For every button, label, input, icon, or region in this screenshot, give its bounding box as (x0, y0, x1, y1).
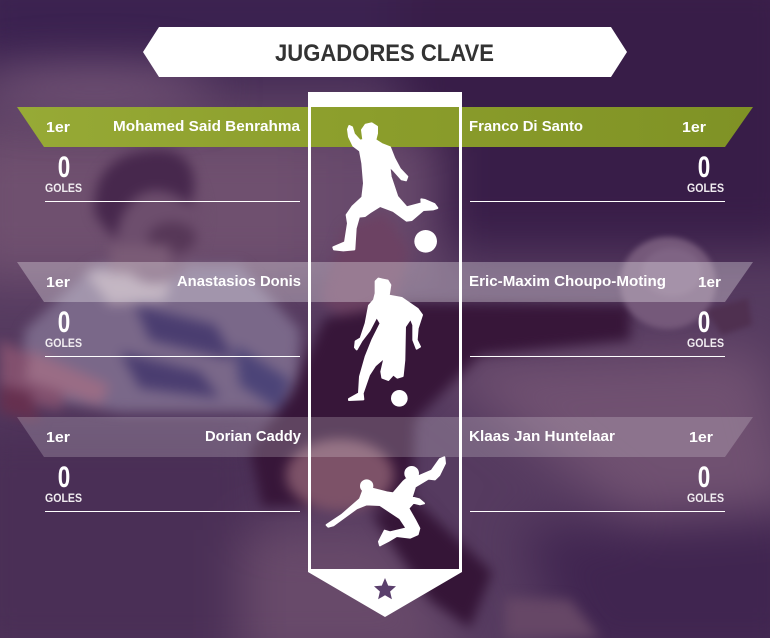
shin (372, 500, 492, 628)
title banner (143, 27, 627, 77)
row 3 right: Klaas Jan Huntelaar (469, 428, 725, 512)
grey ribbon: row 3 (17, 417, 753, 457)
row 1 right: Franco Di Santo: GOLES (687, 183, 724, 195)
row 3 right: Klaas Jan Huntelaar: Klaas Jan Huntelaar (469, 428, 615, 445)
row 1 right: Franco Di Santo (469, 118, 725, 202)
row 2 right: Eric-Maxim Choupo-Moting: 1er (698, 274, 721, 291)
grey ribbon: row 2 (17, 262, 753, 302)
shirt (20, 265, 300, 412)
row 1 left: Mohamed Said Benrahma: Mohamed Said Benrahma (113, 118, 301, 135)
row 3 left: Dorian Caddy: GOLES (45, 493, 82, 505)
row 2 left: Anastasios Donis: 1er (46, 274, 70, 291)
row 3 left: Dorian Caddy: 1er (46, 429, 70, 446)
icon: player overhead kick (327, 457, 445, 545)
row 2 left: Anastasios Donis: 0 (58, 305, 70, 339)
row 3 left: Dorian Caddy: Dorian Caddy (205, 428, 302, 445)
row 1 left: Mohamed Said Benrahma: GOLES (45, 183, 82, 195)
title text: JUGADORES CLAVE (275, 40, 494, 67)
central white frame (308, 92, 462, 617)
row 1 left: Mohamed Said Benrahma (45, 118, 301, 202)
row 1 left: Mohamed Said Benrahma: 1er (46, 119, 70, 136)
head (107, 153, 203, 283)
row 2 left: Anastasios Donis: GOLES (45, 338, 82, 350)
row 2 left: Anastasios Donis (45, 273, 301, 357)
green ribbon: row 1 (17, 107, 753, 147)
row 1 right: Franco Di Santo: 0 (698, 150, 710, 184)
pale wrist (320, 212, 410, 320)
icon: player kicking ball (333, 123, 437, 253)
row 3 right: Klaas Jan Huntelaar: 0 (698, 460, 710, 494)
row 2 right: Eric-Maxim Choupo-Moting: GOLES (687, 338, 724, 350)
icon: player dribbling (349, 279, 422, 407)
row 3 left: Dorian Caddy: 0 (58, 460, 70, 494)
shoe (505, 598, 600, 638)
row 2 right: Eric-Maxim Choupo-Moting: Eric-Maxim Choupo-Moting (469, 273, 666, 290)
row 2 right: Eric-Maxim Choupo-Moting (469, 273, 725, 357)
row 1 left: Mohamed Said Benrahma: 0 (58, 150, 70, 184)
shorts and raised leg (250, 303, 630, 507)
row 2 left: Anastasios Donis: Anastasios Donis (177, 273, 301, 290)
row 2 right: Eric-Maxim Choupo-Moting: 0 (698, 305, 710, 339)
row 1 right: Franco Di Santo: 1er (682, 119, 706, 136)
ball (620, 237, 716, 329)
knee (286, 439, 394, 511)
row 3 right: Klaas Jan Huntelaar: GOLES (687, 493, 724, 505)
row 3 left: Dorian Caddy (45, 428, 302, 512)
row 1 right: Franco Di Santo: Franco Di Santo (469, 118, 583, 135)
icon: star (374, 578, 396, 599)
row 3 right: Klaas Jan Huntelaar: 1er (689, 429, 713, 446)
